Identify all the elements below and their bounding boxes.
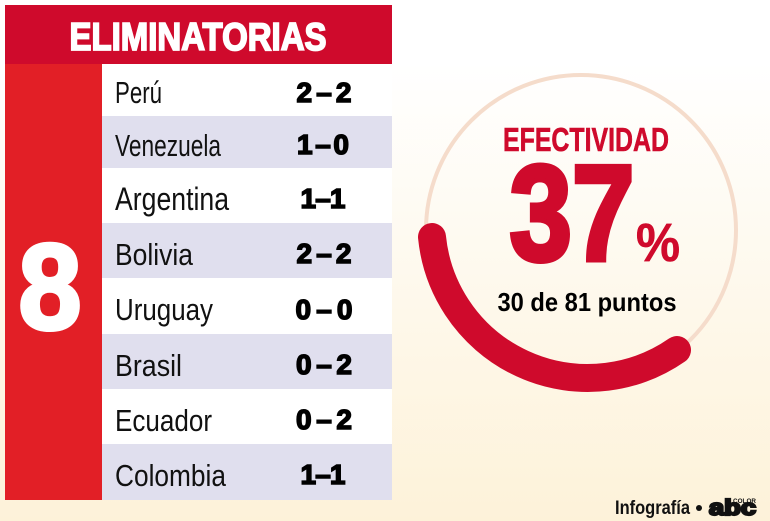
row: Bolivia	[102, 223, 392, 278]
row: Uruguay	[102, 278, 392, 334]
value: 37: 37	[510, 137, 634, 289]
row: Bolivia: 2 – 2	[296, 238, 352, 269]
row: Venezuela: 1 – 0	[297, 129, 349, 160]
row: Colombia: 1 – 1	[300, 459, 346, 490]
table heading: ELIMINATORIAS	[70, 16, 326, 59]
row: Argentina: 1 – 1	[300, 183, 346, 214]
percent sign: %	[636, 213, 680, 273]
logo: abc color: COLOR	[733, 499, 757, 505]
credit line	[615, 495, 757, 520]
panel: effectiveness gauge	[426, 75, 736, 385]
row: Brasil: Brasil	[115, 348, 182, 383]
separator dot	[696, 505, 702, 511]
row: Uruguay: 0 – 0	[296, 294, 352, 325]
panel: results table	[5, 5, 392, 500]
row: Ecuador: Ecuador	[115, 403, 212, 438]
row: Ecuador: 0 – 2	[296, 404, 352, 435]
label: efectividad: EFECTIVIDAD	[503, 121, 669, 158]
row: Colombia	[102, 444, 392, 500]
matches count column	[5, 64, 102, 500]
table heading	[5, 5, 392, 64]
row: Venezuela: Venezuela	[115, 128, 222, 163]
points caption: 30 de 81 puntos	[498, 287, 676, 317]
credit line: Infografía	[615, 498, 690, 519]
row: Perú: 2 – 2	[296, 77, 352, 108]
gauge track ring	[426, 75, 736, 385]
row: Bolivia: Bolivia	[115, 237, 194, 272]
row: Argentina: Argentina	[115, 181, 229, 217]
row: Argentina	[102, 168, 392, 223]
logo: abc color: abc	[709, 495, 756, 520]
row: Perú: Perú	[115, 75, 162, 110]
row: Ecuador	[102, 389, 392, 444]
row: Brasil	[102, 334, 392, 389]
row: Brasil: 0 – 2	[296, 349, 352, 380]
row: Venezuela	[102, 116, 392, 168]
gauge value arc	[432, 237, 677, 378]
row: Perú	[102, 64, 392, 116]
matches count column: 8	[18, 219, 82, 355]
row: Uruguay: Uruguay	[115, 292, 213, 327]
row: Colombia: Colombia	[115, 458, 227, 493]
